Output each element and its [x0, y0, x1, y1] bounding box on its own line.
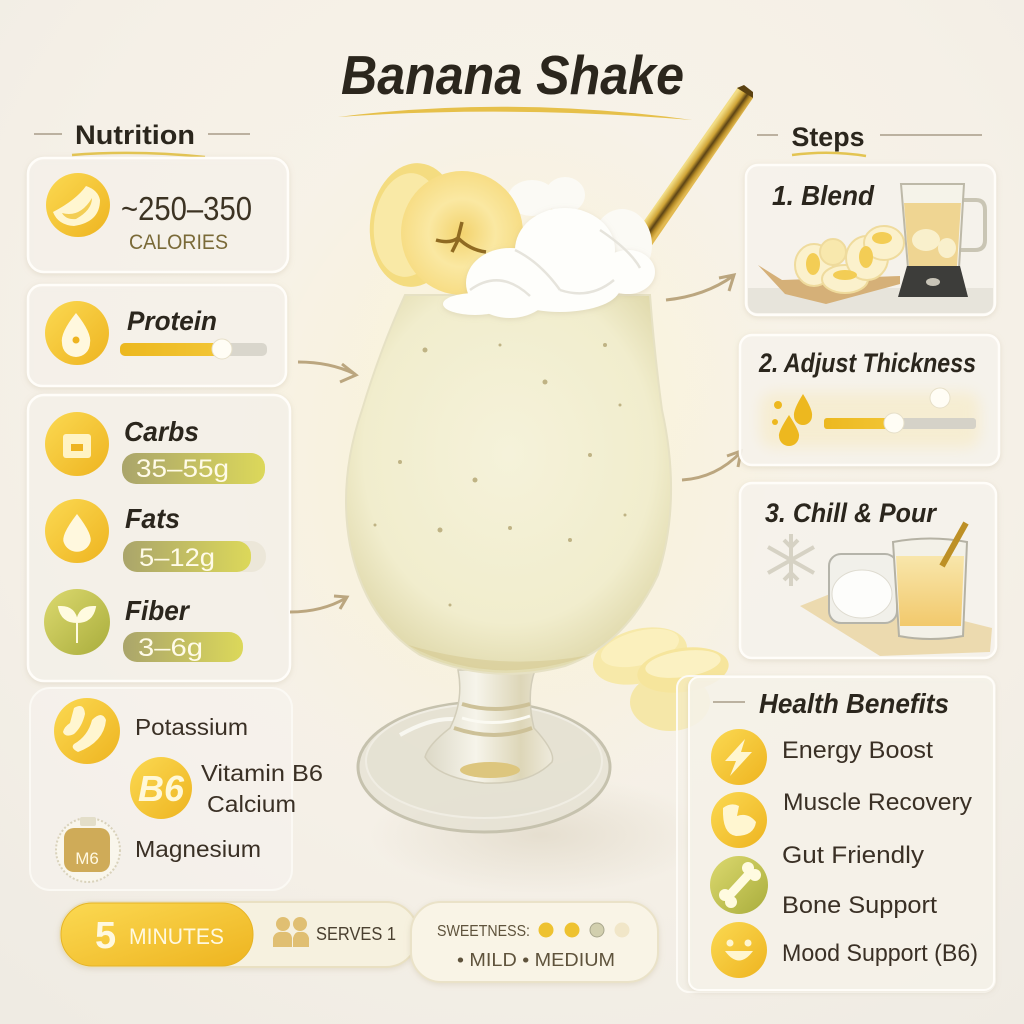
- muscle label: Muscle Recovery: [783, 789, 972, 816]
- panel: step 1 blend: [746, 165, 995, 315]
- heading: nutrition: [34, 120, 250, 157]
- time pill: [61, 903, 253, 966]
- glass bowl with shake: [346, 295, 671, 674]
- protein label: Protein: [127, 306, 217, 336]
- bone label: Bone Support: [782, 892, 937, 919]
- fats pill: [123, 541, 266, 572]
- icon: muscle: [711, 792, 767, 848]
- fiber pill: [123, 632, 243, 662]
- carbs pill: [122, 453, 265, 484]
- sweetness dots: [538, 922, 630, 938]
- straw: [625, 85, 753, 254]
- arrow: fiber to glass: [290, 596, 347, 612]
- icon: fats: [45, 499, 109, 563]
- step 2 label: 2. Adjust Thickness: [758, 348, 976, 378]
- fiber label: Fiber: [125, 595, 191, 626]
- bottom bar: time and serves: [60, 902, 418, 967]
- icon: vitamin B6: [130, 757, 192, 819]
- icon: fiber: [44, 589, 110, 655]
- potassium label: Potassium: [135, 714, 248, 740]
- mood label: Mood Support (B6): [782, 940, 978, 967]
- health benefits heading: Health Benefits: [759, 688, 949, 719]
- honey drops: [772, 394, 812, 446]
- calories value: ~250–350: [121, 190, 252, 227]
- calories label: CALORIES: [129, 231, 228, 254]
- wooden board with banana slices: [758, 226, 904, 304]
- icon: potassium: [54, 698, 120, 764]
- banana slice front: [401, 171, 523, 295]
- heading: steps: Steps: [792, 122, 864, 152]
- panel: health benefits: [677, 676, 995, 992]
- wooden board: [800, 590, 992, 656]
- icon: energy: [711, 729, 767, 785]
- wash behind slider: [760, 392, 980, 448]
- panel: protein: [28, 285, 286, 386]
- heading: steps: [757, 122, 982, 156]
- whipped cream front: [443, 208, 655, 318]
- whipped cream back: [508, 177, 652, 281]
- shake highlights: [374, 343, 626, 670]
- icon: people: [273, 917, 309, 947]
- fiber pill: 3–6g: [138, 634, 203, 662]
- vitamin B6 label: Vitamin B6: [201, 760, 323, 786]
- glass base: [358, 670, 610, 832]
- bowl of ice: [829, 554, 897, 623]
- fats label: Fats: [125, 503, 180, 534]
- panel: calories: [28, 158, 288, 272]
- icon: bone: [710, 856, 768, 914]
- heading: nutrition: Nutrition: [75, 120, 195, 150]
- table shadow: [370, 775, 710, 895]
- carbs label: Carbs: [124, 416, 199, 447]
- arrow: protein to glass: [298, 362, 356, 382]
- arrow: glass to thickness: [682, 451, 741, 480]
- time pill: 5: [95, 915, 116, 957]
- cream folds: [470, 230, 640, 296]
- banana slice back: [364, 159, 464, 291]
- illustration: banana shake glass: [346, 85, 753, 895]
- serves label: SERVES 1: [316, 924, 396, 944]
- icon: carbs: [45, 412, 109, 476]
- banana slices beside glass: [587, 618, 732, 731]
- glass with shake: [893, 523, 967, 639]
- panel: step 2 adjust thickness: [740, 335, 999, 465]
- magnesium label: Magnesium: [135, 836, 261, 862]
- carbs pill: 35–55g: [136, 455, 229, 483]
- thickness slider: [824, 388, 976, 433]
- time pill: MINUTES: [129, 924, 224, 949]
- icon: banana slice: [46, 173, 110, 237]
- title: Banana Shake: [341, 44, 684, 106]
- gut label: Gut Friendly: [782, 842, 924, 869]
- icon: smile: [711, 922, 767, 978]
- icon: protein drop: [45, 301, 109, 365]
- icon: magnesium: M6: [75, 849, 99, 868]
- panel: sweetness: [411, 902, 658, 982]
- icon: magnesium: [56, 817, 120, 882]
- energy label: Energy Boost: [782, 737, 933, 764]
- arrow: glass to blend: [666, 275, 734, 300]
- icon: snowflake: [768, 534, 814, 586]
- protein bar: [120, 339, 267, 359]
- fats pill: 5–12g: [139, 544, 215, 572]
- calcium label: Calcium: [207, 791, 296, 817]
- panel: macros: [28, 395, 290, 681]
- sweetness levels: • MILD • MEDIUM: [457, 950, 615, 970]
- step 1 label: 1. Blend: [772, 180, 875, 211]
- panel: step 3 chill and pour: [740, 483, 996, 658]
- table strip: [748, 288, 993, 313]
- icon: vitamin B6: B6: [138, 768, 185, 809]
- sweetness label: SWEETNESS:: [437, 923, 530, 940]
- panel: minerals: [30, 688, 323, 890]
- blender: [898, 184, 985, 297]
- step 3 label: 3. Chill & Pour: [765, 498, 937, 528]
